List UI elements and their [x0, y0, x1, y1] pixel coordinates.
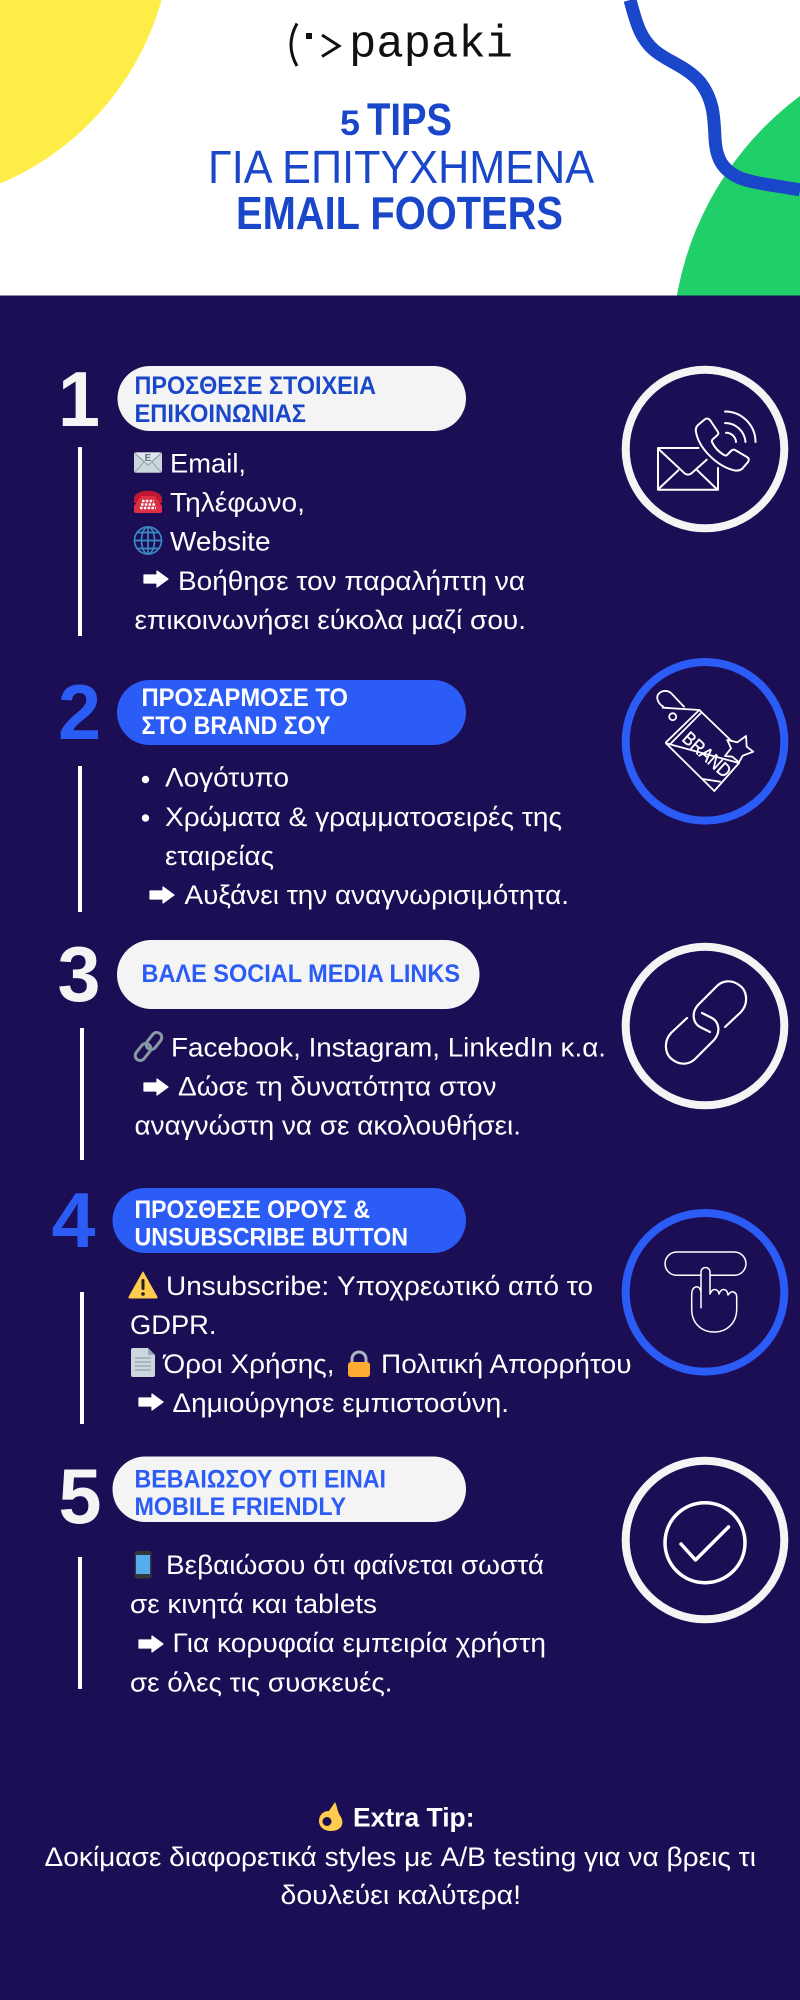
vertical rule 3	[80, 1028, 84, 1160]
body text 5	[130, 1550, 546, 1698]
title: EMAIL FOOTERS	[236, 187, 563, 239]
body text 5: Για κορυφαία εμπειρία χρήστη	[172, 1628, 546, 1658]
body text 2: Αυξάνει την αναγνωρισιμότητα.	[184, 880, 569, 910]
heading pill 4	[112, 1188, 466, 1253]
icon: arrow	[150, 887, 174, 903]
decoration: yellow circle	[0, 0, 172, 206]
number 5: 5	[58, 1452, 102, 1540]
body text 3	[133, 1030, 606, 1140]
body text 2: εταιρείας	[165, 841, 274, 871]
heading pill 1: ΠΡΟΣΘΕΣΕ ΣΤΟΙΧΕΙΑ	[134, 372, 376, 400]
panel: tip 2	[58, 662, 784, 912]
vertical rule 5	[78, 1557, 82, 1689]
icon: telephone emoji	[134, 491, 162, 513]
icon: envelope emoji	[134, 452, 162, 473]
icon: link emoji	[133, 1030, 164, 1063]
heading pill 5: MOBILE FRIENDLY	[134, 1493, 346, 1521]
icon badge: button with pointing hand	[626, 1213, 784, 1372]
heading pill 3	[117, 940, 480, 1009]
body text 3: αναγνώστη να σε ακολουθήσει.	[134, 1110, 521, 1140]
heading pill 2: ΣΤΟ BRAND ΣΟΥ	[142, 712, 331, 740]
icon badge: check mark	[626, 1461, 784, 1619]
icon badge: brand tag	[626, 662, 784, 821]
decoration: green circle	[672, 33, 800, 669]
number 2: 2	[58, 668, 101, 756]
heading pill 5: ΒΕΒΑΙΩΣΟΥ ΟΤΙ ΕΙΝΑΙ	[134, 1465, 386, 1493]
decoration: blue wave	[630, 0, 800, 190]
body text 3: Facebook, Instagram, LinkedIn κ.α.	[171, 1032, 606, 1062]
vertical rule 4	[80, 1292, 84, 1424]
extra tip heading: Extra Tip:	[353, 1802, 474, 1832]
body text 2: Χρώματα & γραμματοσειρές της	[165, 802, 562, 832]
icon: ok hand emoji	[319, 1802, 342, 1831]
heading pill 1: ΕΠΙΚΟΙΝΩΝΙΑΣ	[134, 400, 306, 428]
body text 5: Βεβαιώσου ότι φαίνεται σωστά	[166, 1550, 544, 1580]
icon: arrow	[139, 1636, 163, 1652]
body text 1: Email,	[170, 448, 246, 478]
icon: mobile phone emoji	[134, 1551, 152, 1578]
heading pill 3: ΒΑΛΕ SOCIAL MEDIA LINKS	[142, 960, 460, 988]
vertical rule 1	[78, 447, 82, 636]
icon: warning emoji	[129, 1272, 157, 1298]
heading pill 2: ΠΡΟΣΑΡΜΟΣΕ ΤΟ	[142, 684, 348, 712]
icon badge: phone and envelope	[626, 370, 784, 528]
title: TIPS	[367, 94, 452, 145]
body text 1	[134, 448, 526, 635]
body text 5: σε κινητά και tablets	[130, 1589, 377, 1619]
extra tip text	[44, 1842, 756, 1910]
body text 1: Βοήθησε τον παραλήπτη να	[178, 566, 525, 596]
heading pill 5	[112, 1456, 466, 1522]
number 3: 3	[58, 930, 100, 1018]
panel: tip 3	[58, 930, 784, 1160]
body text 2: Λογότυπο	[165, 762, 289, 792]
title	[208, 94, 594, 239]
body text 4: Δημιούργησε εμπιστοσύνη.	[172, 1388, 509, 1418]
icon: lock emoji	[348, 1352, 370, 1377]
panel: extra tip	[44, 1802, 756, 1910]
vertical rule 2	[78, 766, 82, 912]
body text 4: Unsubscribe: Υποχρεωτικό από το	[166, 1271, 593, 1301]
icon: document emoji	[131, 1348, 155, 1377]
icon badge: brand tag: BRAND	[678, 728, 735, 783]
number 4: 4	[52, 1176, 96, 1264]
body text 1: επικοινωνήσει εύκολα μαζί σου.	[134, 605, 526, 635]
extra tip text: δουλεύει καλύτερα!	[280, 1880, 521, 1910]
heading pill 2	[117, 680, 466, 745]
body text 1: Τηλέφωνο,	[170, 488, 305, 518]
logo: papaki: papaki	[349, 20, 513, 70]
body text 4: GDPR.	[130, 1310, 216, 1340]
extra tip text: Δοκίμασε διαφορετικά styles με A/B testing για να βρεις τι	[44, 1842, 756, 1872]
heading pill 4: ΠΡΟΣΘΕΣΕ ΟΡΟΥΣ &	[134, 1196, 370, 1224]
body text 5: σε όλες τις συσκευές.	[130, 1668, 392, 1698]
title: ΓΙΑ ΕΠΙΤΥΧΗΜΕΝΑ	[208, 141, 594, 193]
panel: tip 5	[58, 1452, 784, 1698]
icon badge: chain link	[626, 947, 784, 1105]
icon: globe emoji	[134, 527, 162, 554]
title: 5	[340, 104, 360, 143]
body text 1: Website	[170, 526, 270, 556]
panel: header	[0, 0, 800, 669]
icon: envelope emoji: E	[144, 453, 152, 464]
number 1: 1	[58, 355, 100, 443]
body text 2	[142, 762, 569, 910]
body text 4: Πολιτική Απορρήτου	[381, 1349, 632, 1379]
icon: arrow	[139, 1394, 163, 1410]
heading pill 1	[118, 366, 466, 431]
body text 4: Όροι Χρήσης,	[162, 1349, 334, 1379]
icon: arrow	[144, 571, 168, 587]
panel: tip 1	[58, 355, 784, 636]
body text 4	[129, 1271, 632, 1418]
heading pill 4: UNSUBSCRIBE BUTTON	[134, 1224, 408, 1252]
panel: tip 4	[52, 1176, 784, 1424]
body text 3: Δώσε τη δυνατότητα στον	[178, 1072, 496, 1102]
icon: arrow	[144, 1079, 168, 1095]
